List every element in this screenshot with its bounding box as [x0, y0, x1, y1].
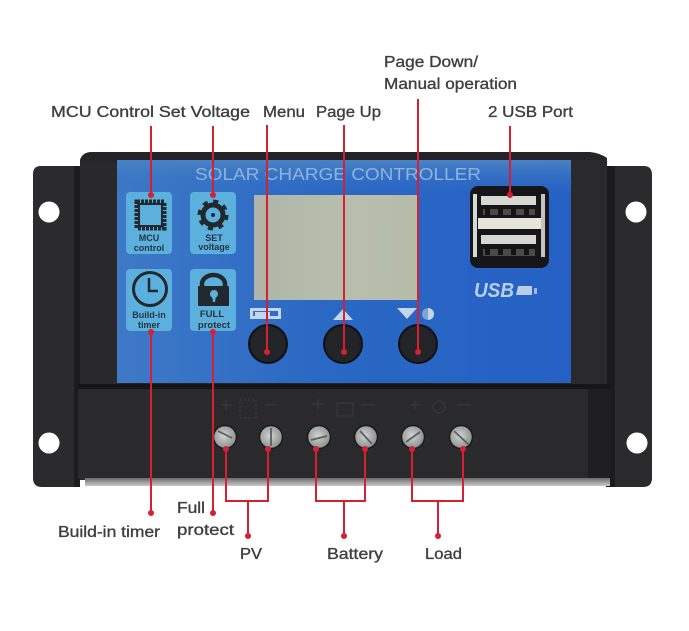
icon tile: MCU control: MCU: [139, 233, 159, 243]
label: MCU Control Set Voltage: MCU Control Set Voltage: [51, 104, 250, 121]
USB ports: [470, 186, 549, 268]
label: Page Down / Manual operation: Page Down/: [384, 54, 479, 71]
buttons: [249, 325, 437, 363]
icon tile: Build-in timer: timer: [138, 320, 160, 330]
callout dots: [148, 192, 513, 539]
USB logo: USB: [474, 280, 514, 302]
label: Page Up: Page Up: [316, 104, 381, 121]
button symbols: [250, 308, 434, 320]
label: Build-in timer: Build-in timer: [58, 524, 160, 541]
icon tile: MCU control: [126, 192, 172, 254]
icon tile: FULL protect: FULL: [200, 309, 224, 320]
USB logo: [474, 280, 537, 302]
mounting holes: [38, 202, 648, 454]
main body: [80, 152, 607, 480]
label: Menu: Menu: [263, 104, 305, 121]
left mounting bracket: [33, 166, 78, 487]
label: Full protect: protect: [177, 522, 235, 539]
callout lines: top: [151, 99, 510, 352]
controller housing: [33, 152, 652, 487]
label: Full protect: Full: [177, 500, 205, 517]
icon tile: FULL protect: protect: [198, 320, 231, 331]
label: 2 USB Port: 2 USB Port: [488, 104, 574, 121]
terminal screws: [214, 426, 472, 448]
blue front panel: [117, 160, 571, 383]
icon tile: FULL protect: [190, 269, 236, 331]
icon tile: MCU control: control: [134, 243, 164, 253]
label: PV: PV: [240, 546, 263, 563]
icon tile: SET voltage: [190, 192, 236, 254]
LCD screen: [254, 195, 419, 300]
callout lines: bottom: [151, 332, 463, 536]
right mounting bracket: [610, 166, 652, 487]
icon tile: SET voltage: SET: [205, 233, 223, 243]
icon tile: Build-in timer: [126, 269, 172, 331]
label: Page Down / Manual operation: Manual operation: [384, 76, 517, 93]
label: Battery: Battery: [327, 546, 383, 563]
terminal block: [78, 384, 611, 486]
icon tile: SET voltage: voltage: [198, 242, 230, 252]
label: Load: Load: [425, 546, 462, 563]
icon tile: Build-in timer: Build-in: [132, 310, 166, 320]
label: Full protect: [177, 500, 235, 539]
label: Page Down / Manual operation: [384, 54, 517, 93]
panel title: SOLAR CHARGE CONTROLLER: [195, 164, 481, 184]
terminal polarity marks: [221, 399, 470, 418]
